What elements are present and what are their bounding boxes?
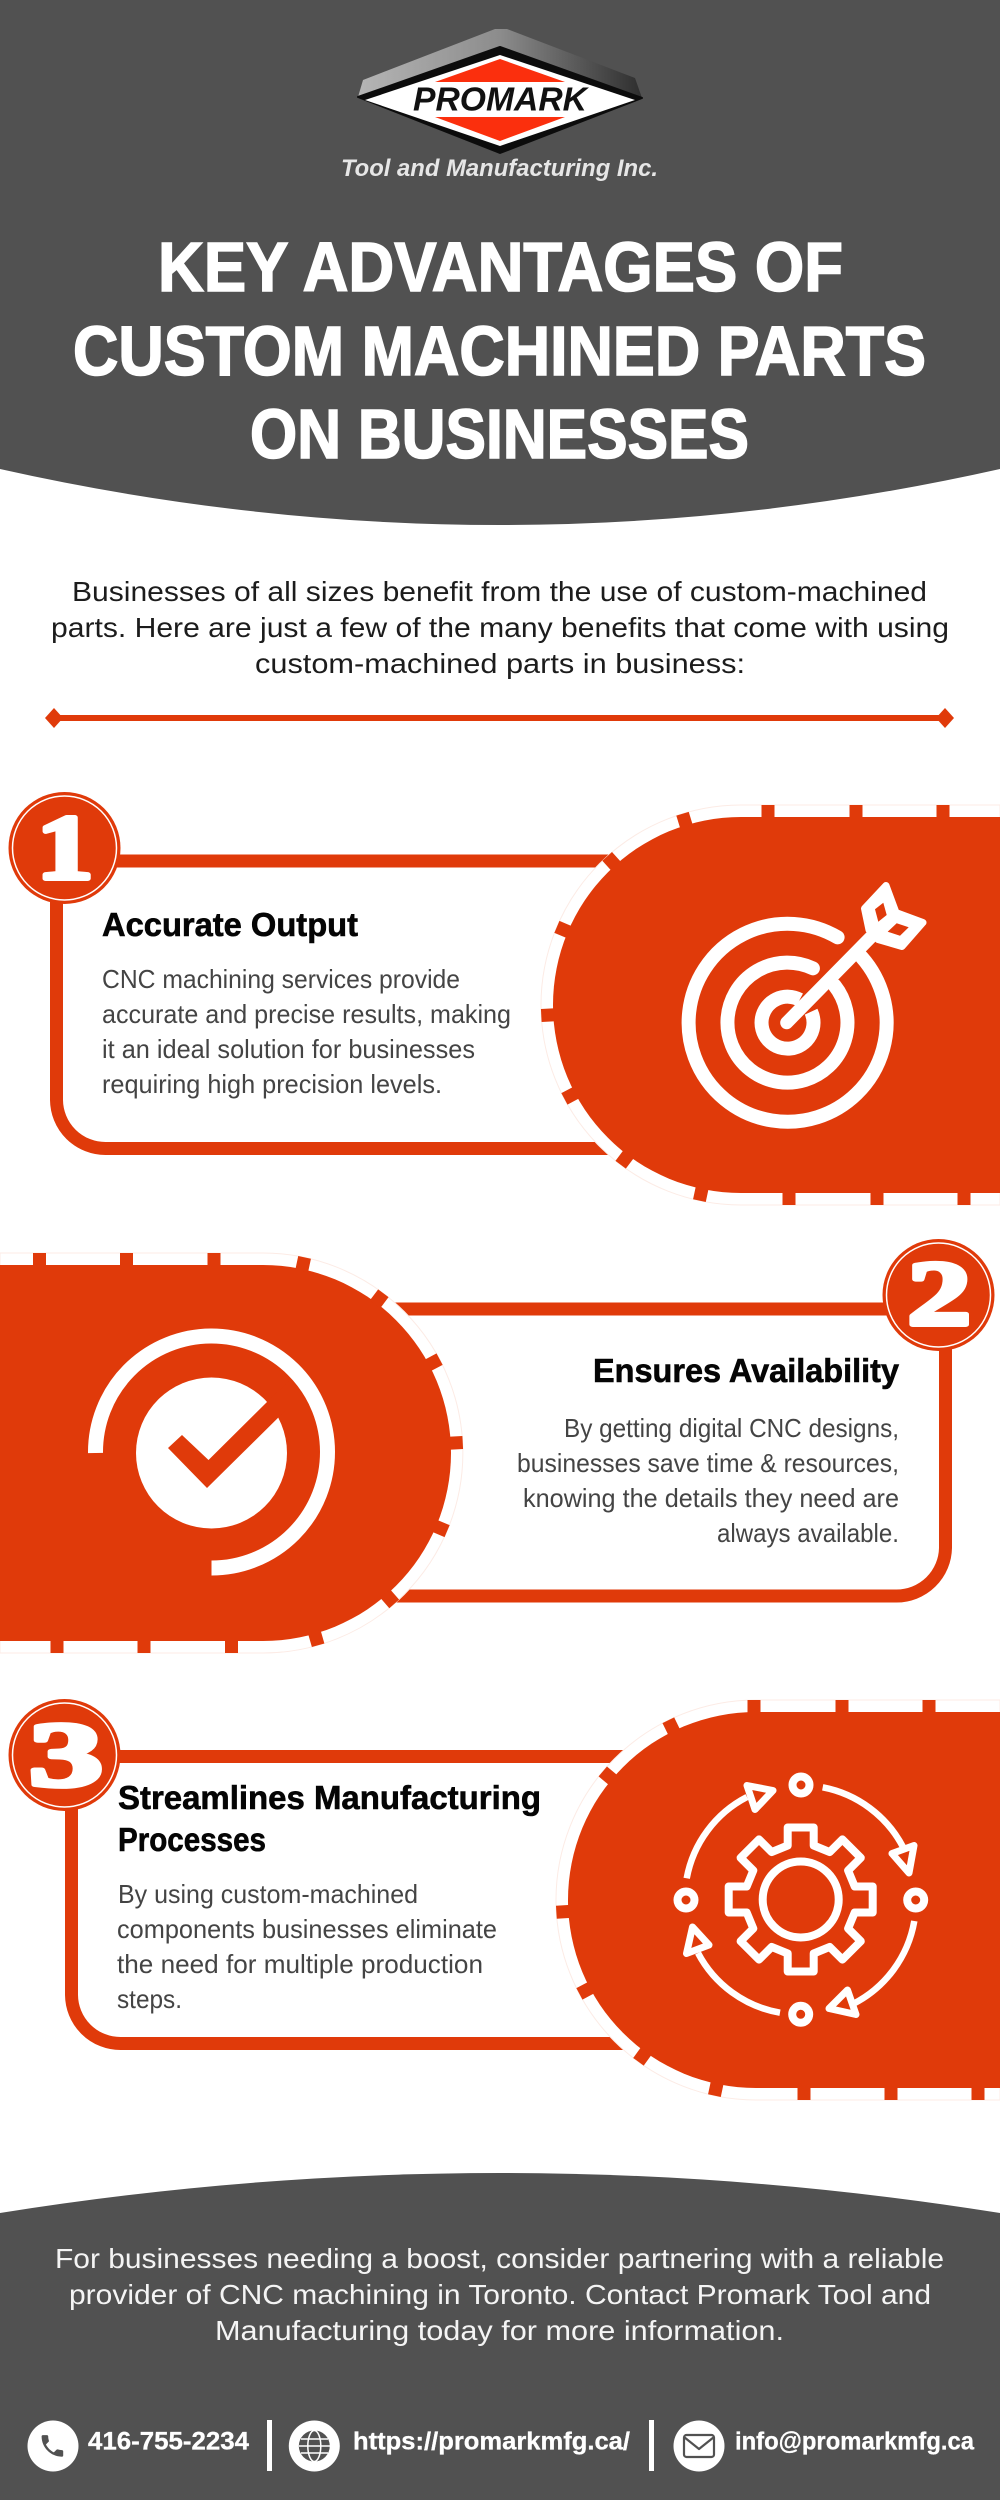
badge 1 xyxy=(8,792,120,904)
contact: email: info@promarkmfg.ca xyxy=(735,2428,975,2456)
text box frame 2 xyxy=(360,1309,946,1596)
heading 1: Accurate Output xyxy=(102,906,358,943)
intro text xyxy=(51,576,949,679)
closing text: Manufacturing today for more information. xyxy=(215,2315,784,2346)
contact: website xyxy=(289,2420,630,2472)
icon: gear with cycle arrows xyxy=(678,1776,924,2023)
header panel xyxy=(0,0,1000,525)
body 3: components businesses eliminate xyxy=(117,1914,497,1944)
closing text xyxy=(55,2243,944,2346)
heading 3: Processes xyxy=(118,1821,266,1858)
separator 2 xyxy=(649,2420,654,2471)
body 2: By getting digital CNC designs, xyxy=(564,1413,899,1443)
contact: website: https://promarkmfg.ca/ xyxy=(353,2428,630,2456)
closing text: provider of CNC machining in Toronto. Contact Promark Tool and xyxy=(69,2279,931,2310)
title: ON BUSINESSES xyxy=(250,395,749,473)
text box frame 1 xyxy=(56,861,640,1148)
blob 1 xyxy=(541,805,1000,1205)
body 1: accurate and precise results, making xyxy=(102,999,511,1029)
contact: phone xyxy=(28,2420,249,2472)
heading 2: Ensures Availability xyxy=(593,1352,900,1389)
intro text: custom-machined parts in business: xyxy=(255,648,745,679)
intro text: Businesses of all sizes benefit from the use of custom-machined xyxy=(72,576,927,607)
badge 1: 1 xyxy=(36,796,94,898)
divider xyxy=(45,708,954,728)
footer panel xyxy=(0,2173,1000,2500)
body 1: requiring high precision levels. xyxy=(102,1069,442,1099)
logo xyxy=(341,29,658,182)
logo: Tool and Manufacturing Inc. xyxy=(341,155,658,182)
body 1: CNC machining services provide xyxy=(102,964,460,994)
body 2 xyxy=(517,1413,899,1548)
body 1 xyxy=(102,964,511,1099)
title xyxy=(73,228,926,473)
text box frame 3 xyxy=(72,1756,660,2044)
blob 2 xyxy=(0,1253,463,1653)
body 2: businesses save time & resources, xyxy=(517,1448,899,1478)
body 3: By using custom-machined xyxy=(118,1879,418,1909)
body 3: the need for multiple production xyxy=(117,1949,483,1979)
title: CUSTOM MACHINED PARTS xyxy=(73,312,926,390)
contact: phone: 416-755-2234 xyxy=(88,2428,249,2456)
contact: email xyxy=(674,2420,975,2472)
panel: ensures availability xyxy=(0,1239,994,1653)
panel: streamlines manufacturing xyxy=(8,1699,1000,2100)
blob 3 xyxy=(556,1700,1000,2100)
heading 3 xyxy=(118,1779,541,1858)
body 1: it an ideal solution for businesses xyxy=(102,1034,475,1064)
separator 1 xyxy=(267,2420,272,2471)
closing text: For businesses needing a boost, consider partnering with a reliable xyxy=(55,2243,944,2274)
badge 2: 2 xyxy=(908,1242,971,1344)
badge 3 xyxy=(8,1699,120,1811)
panel: accurate output xyxy=(8,792,1000,1205)
badge 2 xyxy=(882,1239,994,1351)
body 2: knowing the details they need are xyxy=(523,1483,899,1513)
heading 3: Streamlines Manufacturing xyxy=(118,1779,541,1816)
icon: target with arrow xyxy=(689,886,923,1122)
body 3 xyxy=(117,1879,497,2014)
intro text: parts. Here are just a few of the many benefits that come with using xyxy=(51,612,949,643)
icon: check mark in circle xyxy=(95,1336,327,1568)
badge 3: 3 xyxy=(29,1704,103,1806)
body 3: steps. xyxy=(117,1984,182,2014)
body 2: always available. xyxy=(717,1518,899,1548)
title: KEY ADVANTAGES OF xyxy=(158,228,843,306)
logo: PROMARK xyxy=(413,80,589,118)
